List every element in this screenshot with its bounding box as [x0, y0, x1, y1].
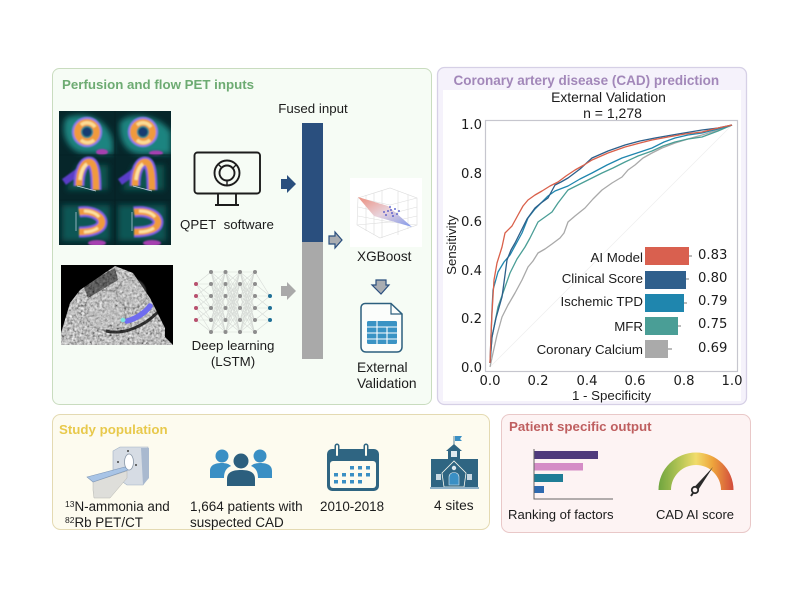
arrow: software to fused input [281, 175, 296, 193]
label: External Validation: External [357, 360, 408, 375]
y axis ticks: 0.8 [461, 167, 482, 182]
y axis ticks: 0.6 [461, 215, 482, 230]
x axis ticks: 1.0 [722, 374, 742, 389]
y axis ticks: 0.2 [461, 312, 482, 327]
label: ranking of factors: Ranking of factors [508, 507, 614, 522]
x axis ticks: 0.2 [528, 374, 548, 389]
y axis label: Sensitivity [444, 215, 459, 275]
chart: ranking of factors [534, 449, 613, 499]
y axis ticks: 0.4 [461, 264, 482, 279]
bar: MFR 0.75 [614, 317, 727, 335]
label: QPET software: QPET software [180, 217, 274, 232]
icon: calendar [327, 446, 379, 491]
curve: AI model [490, 125, 732, 363]
label: 13N-ammonia and 82Rb PET/CT: Rb PET/CT [74, 515, 143, 530]
bar: AI Model 0.83 [591, 247, 727, 265]
arrow: XGBoost to external validation [372, 280, 389, 294]
label: CAD AI score: CAD AI score [656, 507, 734, 522]
icon: PET/CT scanner [87, 447, 149, 498]
y axis ticks: 1.0 [461, 118, 482, 133]
curve: MFR [490, 125, 732, 363]
image: PET perfusion slices [59, 111, 171, 246]
label: 13N-ammonia and 82Rb PET/CT: N-ammonia and [74, 499, 170, 514]
bar: Coronary Calcium 0.69: 0.69 [698, 341, 727, 356]
x axis ticks [480, 374, 742, 389]
curve: coronary calcium [490, 125, 732, 367]
bar: MFR 0.75: MFR [614, 319, 643, 334]
bar: fused input stack [302, 123, 323, 359]
chart: XGBoost 3D surface [350, 178, 422, 247]
bar: AI Model 0.83: 0.83 [698, 248, 727, 263]
bar: Coronary Calcium 0.69: Coronary Calcium [537, 342, 643, 357]
x axis ticks: 0.8 [674, 374, 694, 389]
bar: Clinical Score 0.80 [562, 271, 727, 289]
bar: Clinical Score 0.80: 0.80 [698, 271, 727, 286]
bar: Coronary Calcium 0.69 [537, 340, 727, 358]
x axis ticks: 0.4 [577, 374, 597, 389]
label: 1,664 patients with suspected CAD: 1,664 patients with [190, 499, 303, 514]
chart title: n = 1,278 [583, 105, 642, 121]
arrow: deep learning to fused input [281, 282, 296, 300]
heading: patient specific output: Patient specific output [509, 419, 652, 434]
y axis ticks [461, 118, 482, 376]
chart: ROC curves [444, 118, 742, 403]
label: XGBoost: XGBoost [357, 249, 412, 264]
label: 1,664 patients with suspected CAD: suspected CAD [190, 515, 284, 530]
panel: perfusion and flow PET inputs [52, 68, 432, 404]
diagram: LSTM neural network [194, 270, 272, 334]
bar: MFR 0.75: 0.75 [698, 317, 727, 332]
label: 13N-ammonia and 82Rb PET/CT: 13 [65, 499, 75, 509]
panel: patient specific output [502, 414, 750, 532]
curve: ischemic TPD [490, 125, 732, 363]
label: 2010-2018: 2010-2018 [320, 499, 384, 514]
bar: Ischemic TPD 0.79: Ischemic TPD [560, 294, 643, 309]
y axis ticks: 0.0 [461, 361, 482, 376]
label: Fused input: Fused input [278, 101, 348, 116]
bar: AI Model 0.83: AI Model [591, 250, 643, 265]
icon: school building [430, 436, 479, 489]
gauge: CAD AI score [658, 452, 734, 496]
x axis ticks: 0.6 [625, 374, 645, 389]
bar: Clinical Score 0.80: Clinical Score [562, 271, 643, 286]
panel: study population [52, 414, 490, 530]
label: 13N-ammonia and 82Rb PET/CT: 82 [65, 515, 75, 525]
bar: Ischemic TPD 0.79: 0.79 [698, 294, 727, 309]
panel: coronary artery disease prediction [438, 68, 746, 404]
heading: perfusion and flow PET inputs: Perfusion and flow PET inputs [62, 77, 254, 92]
image: CT scan with coronary calcium [61, 265, 173, 345]
icon: monitor with QPET software [194, 152, 260, 205]
chart title: External Validation [551, 89, 666, 105]
label: Deep learning (LSTM): (LSTM) [211, 354, 255, 369]
heading: study population: Study population [59, 422, 168, 437]
curve: clinical score [490, 125, 732, 363]
arrow: fused input to XGBoost [329, 232, 342, 248]
icon: spreadsheet document [361, 304, 402, 352]
label: 4 sites: 4 sites [434, 498, 474, 513]
icon: patients group [210, 450, 272, 486]
label: Deep learning (LSTM): Deep learning [192, 338, 274, 353]
heading: coronary artery disease prediction: Coronary artery disease (CAD) prediction [454, 73, 719, 88]
x axis label: 1 - Specificity [572, 388, 651, 403]
bar: Ischemic TPD 0.79 [560, 294, 727, 312]
chart: AUC bars [537, 247, 727, 358]
label: External Validation: Validation [357, 376, 417, 391]
x axis ticks: 0.0 [480, 374, 500, 389]
